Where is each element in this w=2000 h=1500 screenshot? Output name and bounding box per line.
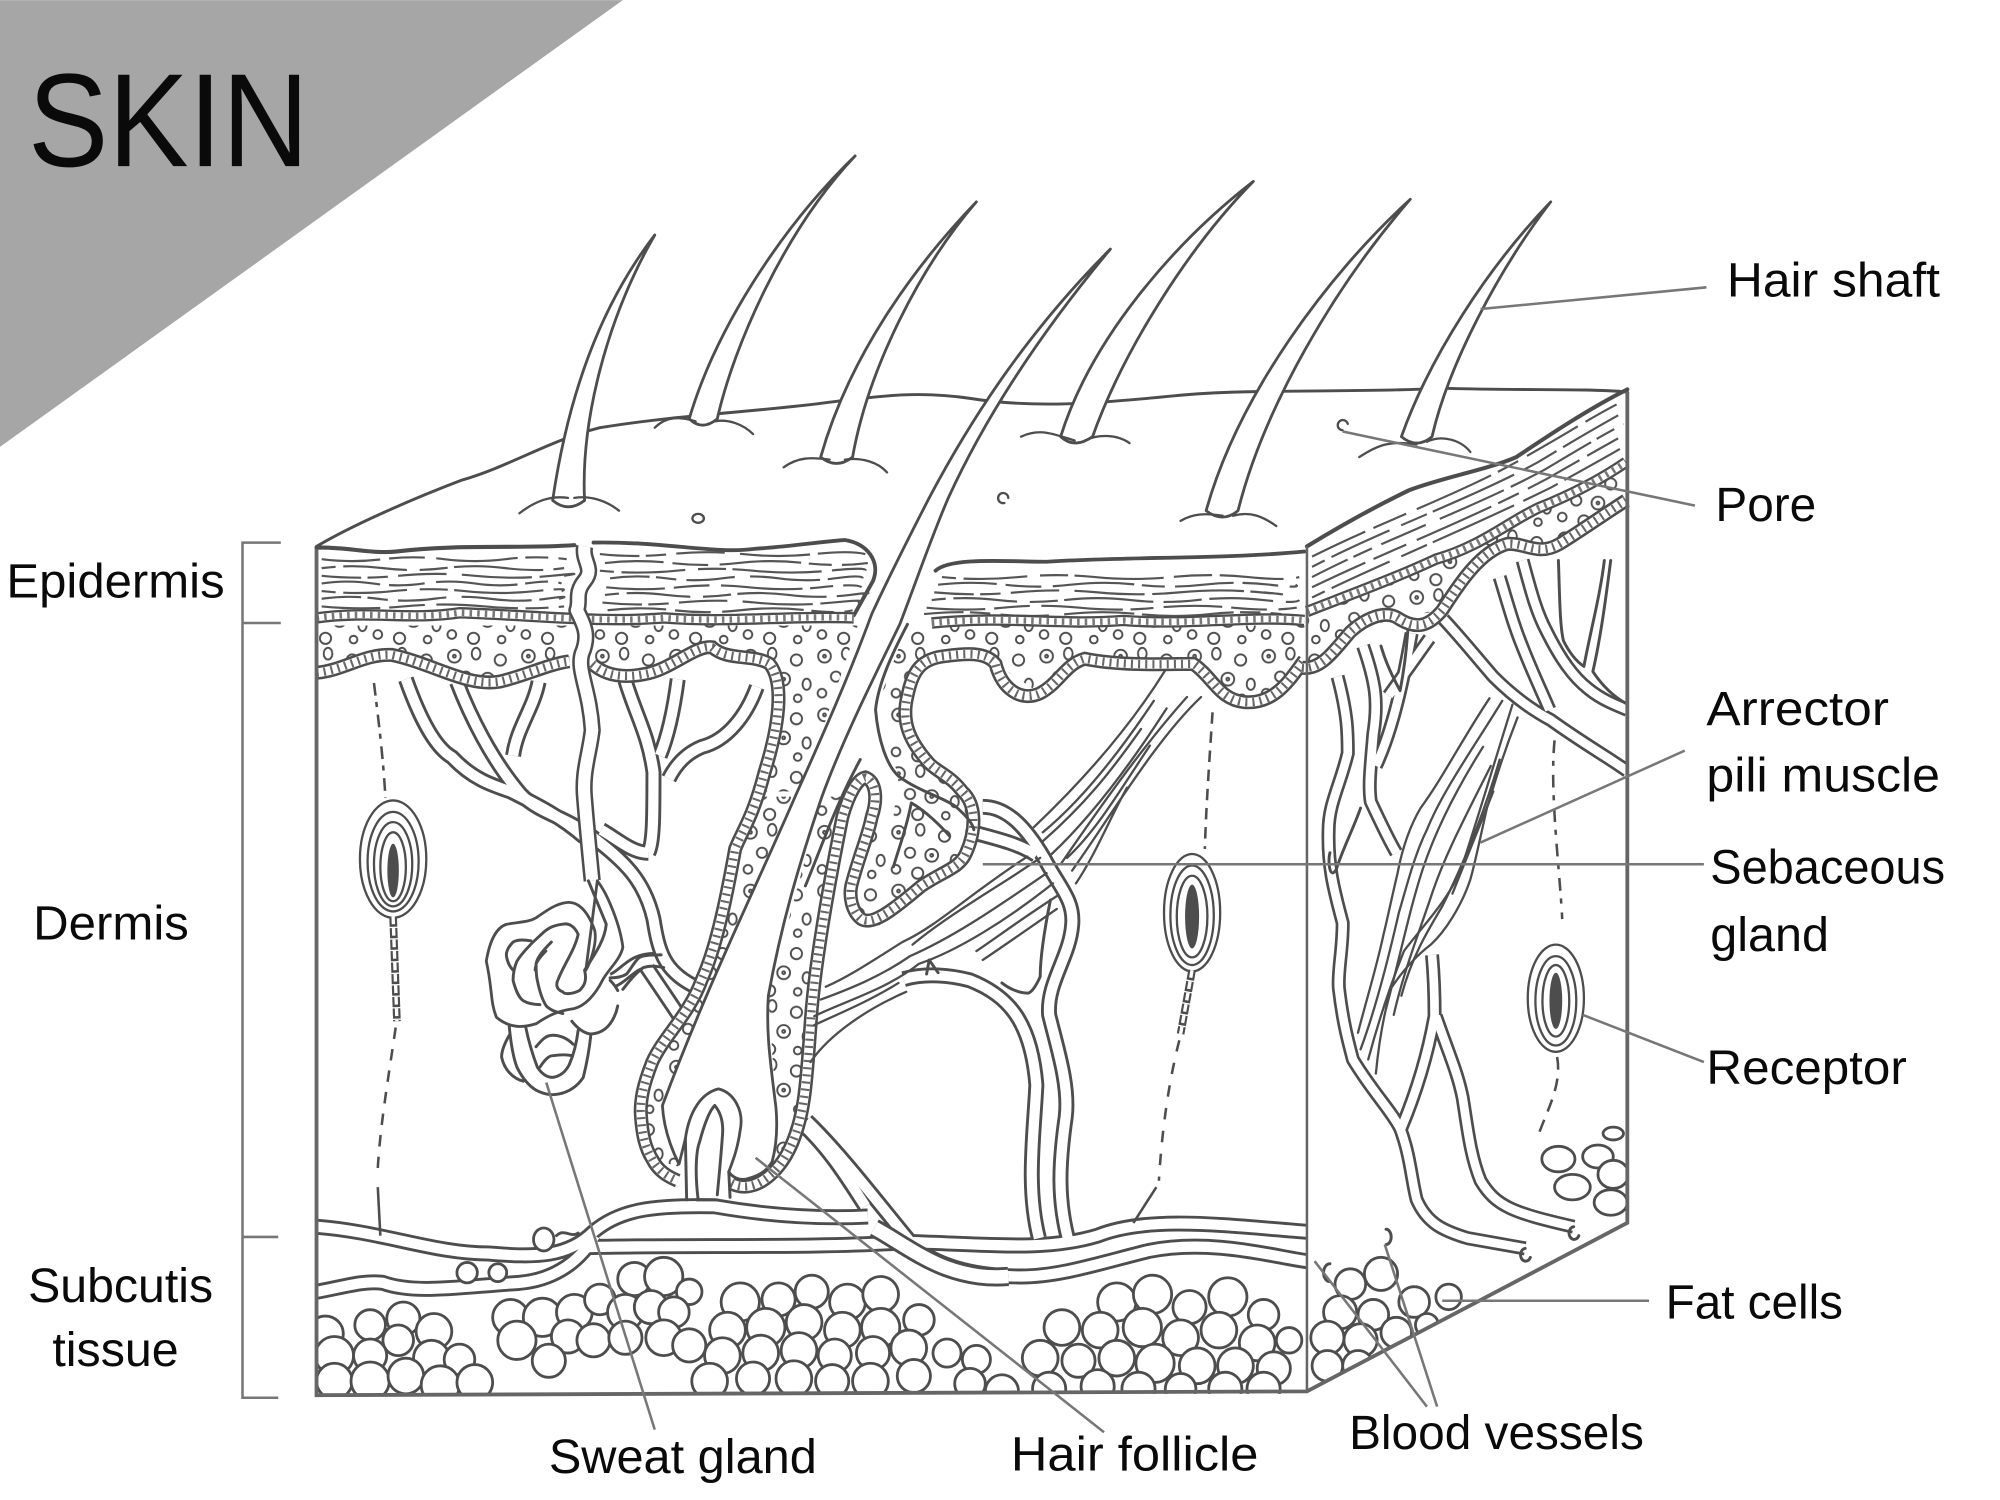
label: Subcutis tissue: tissue <box>52 1323 179 1377</box>
label: Arrector pili muscle: Arrector <box>1706 682 1889 736</box>
nerve fibres <box>374 683 1562 1236</box>
lower vessel extra <box>874 1228 1008 1277</box>
fat cluster one <box>318 1300 494 1394</box>
label: Sebaceous gland: gland <box>1710 908 1829 962</box>
epidermis strata front <box>317 540 1304 616</box>
fat cluster two <box>493 1257 702 1377</box>
basal cell bands <box>317 462 1626 1187</box>
side vessels <box>1329 560 1627 1248</box>
title corner banner <box>0 0 623 447</box>
arrector pili muscle fibres front <box>810 670 1201 1062</box>
hair shafts <box>553 156 1551 517</box>
hair follicle shaft <box>662 249 1110 1179</box>
sebaceous gland outline <box>805 624 974 886</box>
label: Hair shaft: Hair shaft <box>1727 253 1941 307</box>
label: Arrector pili muscle: pili muscle <box>1706 748 1940 802</box>
papillary dermis cell fill <box>319 467 1626 1183</box>
fat cluster four <box>1022 1275 1302 1405</box>
skin surface <box>317 388 1627 546</box>
dermal vessels <box>317 679 1307 1292</box>
label: Fat cells: Fat cells <box>1666 1276 1843 1330</box>
label: Subcutis tissue: Subcutis <box>28 1259 213 1313</box>
epidermis strata side <box>1307 389 1627 597</box>
sweat gland coil <box>486 881 664 1095</box>
receptor right <box>1528 945 1584 1052</box>
leader lines <box>546 287 1706 1432</box>
hair base creases and pores <box>519 418 1470 526</box>
label: Receptor: Receptor <box>1706 1041 1907 1095</box>
receptor middle <box>1164 854 1220 971</box>
fat cells <box>308 1257 1302 1408</box>
label: Sweat gland: Sweat gland <box>549 1430 817 1484</box>
small fat cells by vessel <box>457 1228 1391 1283</box>
label: Dermis: Dermis <box>33 897 189 951</box>
fat cluster three <box>673 1275 1019 1408</box>
title: SKIN <box>28 47 309 195</box>
label: Pore: Pore <box>1715 478 1816 532</box>
label: Hair follicle: Hair follicle <box>1011 1427 1258 1481</box>
side vessel branches <box>1329 560 1626 1261</box>
label: Sebaceous gland: Sebaceous <box>1710 840 1945 894</box>
hair papilla <box>685 1105 730 1200</box>
bracket: epidermis, dermis, subcutis <box>243 543 281 1398</box>
skin block diagram <box>308 156 1629 1408</box>
receptor left <box>360 800 426 918</box>
label: Epidermis: Epidermis <box>6 554 225 608</box>
arrector pili muscle fibres side <box>1358 698 1518 1074</box>
block outline <box>317 392 1627 1395</box>
label: Blood vessels: Blood vessels <box>1349 1406 1644 1460</box>
sweat duct <box>577 546 592 881</box>
fat cluster side <box>1311 1127 1629 1381</box>
